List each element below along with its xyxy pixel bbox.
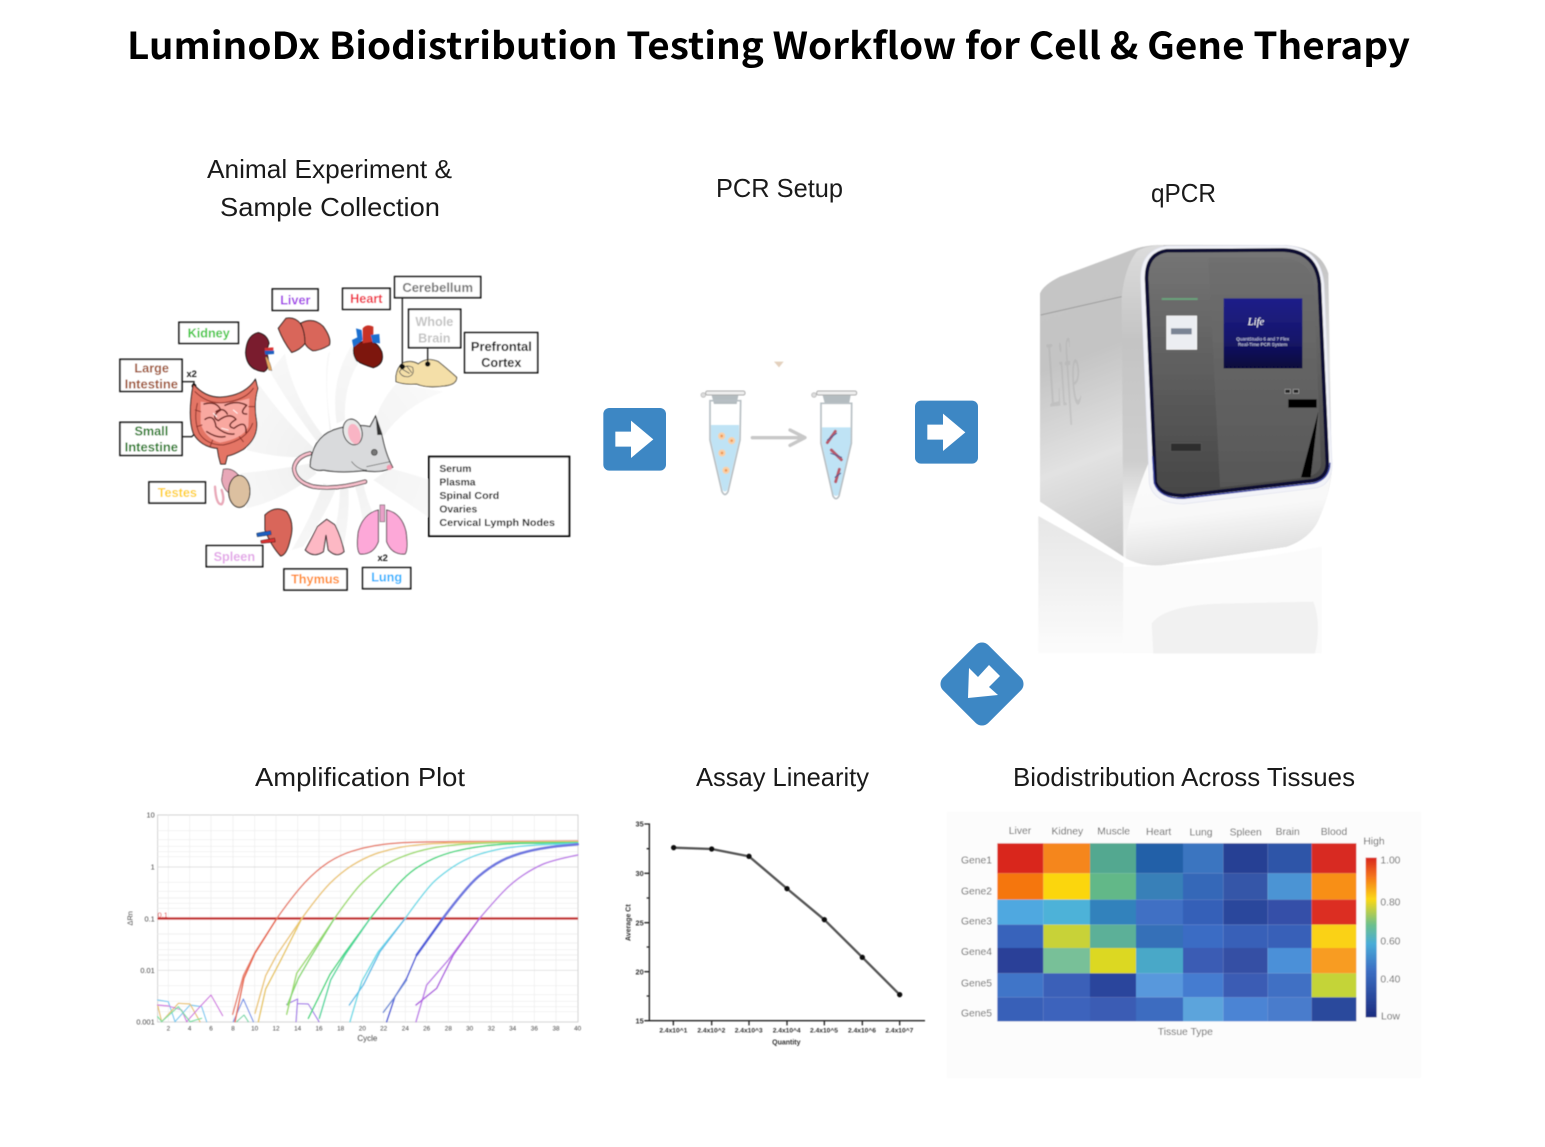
x axis title: Cycle — [357, 1034, 378, 1043]
heatmap cells — [997, 843, 1356, 1021]
perforated section — [1208, 258, 1321, 487]
label: small intestine: Intestine — [125, 440, 178, 454]
list box: other samples: Spinal Cord — [439, 491, 499, 502]
x axis labels: 22 — [380, 1025, 388, 1032]
black numeral seven — [1301, 412, 1318, 477]
axes — [644, 823, 925, 1025]
x axis labels — [167, 1025, 582, 1032]
white base — [1126, 463, 1332, 565]
row labels: Gene3 — [961, 917, 992, 928]
row labels: Gene1 — [961, 856, 992, 867]
column labels: Blood — [1321, 827, 1347, 838]
x axis labels: 12 — [272, 1025, 280, 1032]
label: small intestine — [120, 422, 182, 455]
reflection — [1038, 516, 1322, 653]
organ: lung — [357, 505, 407, 554]
label: large intestine — [120, 359, 182, 391]
x axis labels: 24 — [402, 1025, 409, 1032]
screen text: Life — [1247, 317, 1265, 328]
blue edge glow — [1153, 457, 1330, 498]
column labels: Liver — [1009, 826, 1032, 837]
colour scale: 1.00 — [1380, 856, 1401, 867]
amplification curves — [233, 841, 578, 1022]
heading: biodistribution across tissues: Biodistribution Across Tissues — [1013, 762, 1355, 792]
organ: kidney — [246, 333, 274, 372]
label: whole brain: Brain — [418, 331, 451, 345]
row labels: Gene4 — [961, 947, 992, 958]
y axis labels: 25 — [636, 918, 644, 927]
y axis labels: 0.01 — [140, 966, 155, 975]
label: testes: Testes — [158, 486, 197, 500]
label: small intestine: Small — [134, 424, 168, 438]
y axis labels — [636, 820, 644, 1025]
x axis labels: 36 — [531, 1025, 538, 1032]
x axis labels: 38 — [552, 1025, 560, 1032]
title: LuminoDx Biodistribution Testing Workflow for Cell & Gene Therapy — [127, 16, 1410, 70]
label: heart: Heart — [350, 292, 383, 306]
label: heart — [343, 288, 390, 309]
label: lung: Lung — [371, 571, 402, 585]
y axis labels: 0.001 — [136, 1018, 155, 1027]
panel: qPCR instrument — [1038, 245, 1332, 653]
organ: liver — [278, 318, 330, 352]
x axis labels: 40 — [574, 1025, 582, 1032]
screen — [1224, 298, 1302, 368]
instrument body — [1040, 245, 1332, 565]
radiating rays — [240, 345, 443, 550]
x axis labels: 10 — [251, 1025, 259, 1032]
label: kidney: Kidney — [188, 327, 230, 341]
x axis labels: 2.4x10^2 — [697, 1026, 726, 1034]
x axis title: Tissue Type — [1158, 1027, 1213, 1038]
label: x2 large intestine: x2 — [186, 369, 197, 379]
panel: animal organ diagram — [120, 277, 569, 590]
arrow: qPCR to results — [937, 639, 1027, 729]
list box: other samples: Ovaries — [439, 505, 477, 516]
column labels: Kidney — [1052, 827, 1084, 838]
x axis labels: 32 — [488, 1025, 495, 1032]
row labels: Gene5 — [961, 1008, 992, 1019]
label: large intestine: Intestine — [125, 377, 178, 391]
row labels: Gene5 — [961, 978, 992, 989]
y axis labels: 1 — [151, 863, 155, 872]
organ: thymus — [305, 519, 344, 555]
heading: qPCR: qPCR — [1151, 178, 1216, 208]
label: thymus: Thymus — [291, 573, 340, 587]
x axis labels: 14 — [294, 1025, 302, 1032]
x axis labels: 2 — [167, 1025, 171, 1032]
y axis labels: 35 — [636, 820, 644, 829]
heading: animal experiment and sample collection: Animal Experiment & — [207, 154, 452, 184]
row labels: Gene2 — [961, 886, 992, 897]
x axis labels: 8 — [231, 1025, 235, 1032]
x axis labels: 20 — [359, 1025, 366, 1032]
y axis labels: 20 — [636, 967, 644, 976]
y axis labels: 10 — [147, 811, 155, 820]
label: whole brain: Whole — [415, 315, 453, 329]
status light — [1162, 298, 1198, 300]
colour scale: High — [1363, 837, 1385, 848]
colour scale: 0.60 — [1380, 937, 1401, 948]
label: cerebellum — [395, 277, 481, 298]
list box: other samples: Serum — [439, 464, 471, 475]
label leaders — [182, 298, 428, 437]
label: kidney — [179, 322, 238, 343]
model plate — [1171, 443, 1201, 451]
data line — [674, 848, 900, 995]
chart background — [947, 812, 1421, 1078]
label: prefrontal cortex — [465, 333, 538, 373]
y axis labels: 30 — [636, 869, 644, 878]
label: whole brain — [409, 309, 461, 348]
column labels: Spleen — [1230, 827, 1262, 838]
noise traces — [158, 995, 319, 1022]
label: prefrontal cortex: Prefrontal — [471, 340, 532, 354]
screen text — [1236, 317, 1290, 347]
y axis title: Average Ct — [625, 904, 632, 941]
front panel — [1147, 250, 1327, 496]
badge — [1167, 316, 1197, 349]
colour scale: 0.40 — [1380, 974, 1401, 985]
x axis labels: 18 — [337, 1025, 345, 1032]
label: x2 lung: x2 — [377, 553, 388, 563]
organ: testes — [215, 469, 250, 507]
label: prefrontal cortex: Cortex — [481, 356, 521, 370]
column labels — [1009, 826, 1347, 838]
list box: other samples: Plasma — [439, 477, 476, 488]
x axis labels: 4 — [188, 1025, 192, 1032]
screen text: QuantStudio 6 and 7 Flex — [1236, 337, 1290, 342]
heading: animal experiment and sample collection: Sample Collection — [220, 192, 440, 222]
list box: other samples — [429, 457, 569, 536]
x axis labels: 28 — [445, 1025, 452, 1032]
heading: PCR setup: PCR Setup — [716, 173, 843, 203]
lid seam — [1041, 297, 1122, 315]
x axis labels: 26 — [423, 1025, 431, 1032]
row labels — [961, 856, 992, 1019]
x axis labels: 16 — [315, 1025, 323, 1032]
tube with DNA — [812, 391, 857, 499]
USB ports — [1285, 389, 1299, 393]
marker triangle — [774, 362, 784, 367]
chart: biodistribution heatmap — [947, 812, 1421, 1078]
list box: other samples: Cervical Lymph Nodes — [439, 518, 555, 529]
x axis labels: 2.4x10^4 — [773, 1026, 801, 1034]
arrow: PCR setup to qPCR — [915, 401, 978, 464]
front column — [1122, 245, 1163, 565]
x axis labels: 2.4x10^5 — [810, 1026, 838, 1034]
x axis labels: 2.4x10^6 — [848, 1026, 876, 1034]
y axis labels: 0.1 — [144, 914, 155, 923]
tube with cells — [701, 391, 745, 494]
data points — [671, 845, 902, 997]
column labels: Brain — [1276, 827, 1300, 838]
screen text: Real-Time PCR System — [1238, 342, 1287, 347]
label: spleen — [206, 546, 263, 567]
x axis title: Quantity — [772, 1040, 801, 1047]
x axis labels — [659, 1026, 914, 1034]
x axis labels: 34 — [509, 1025, 517, 1032]
x axis labels: 2.4x10^3 — [735, 1026, 763, 1034]
label: testes — [149, 482, 205, 503]
mouse — [294, 416, 393, 488]
x axis labels: 6 — [209, 1025, 213, 1032]
drawer slot — [1288, 399, 1317, 408]
label: cerebellum: Cerebellum — [402, 281, 473, 295]
heading: assay linearity: Assay Linearity — [696, 762, 869, 792]
organ: spleen — [257, 509, 292, 556]
front rim — [1141, 245, 1332, 504]
y axis labels — [136, 811, 155, 1027]
label: large intestine: Large — [134, 361, 169, 375]
organ: large and small intestine — [190, 379, 258, 464]
column labels: Muscle — [1097, 827, 1130, 838]
colour scale: 0.80 — [1380, 898, 1401, 909]
threshold line: 0.1 — [158, 911, 168, 920]
organ: heart — [352, 325, 382, 368]
y axis labels: 15 — [636, 1016, 644, 1025]
label: liver: Liver — [280, 293, 311, 307]
chart: assay linearity — [625, 820, 925, 1047]
column labels: Lung — [1190, 827, 1213, 838]
side logo: Life — [1042, 319, 1085, 427]
x axis labels: 2.4x10^7 — [885, 1026, 914, 1034]
heading: amplification plot: Amplification Plot — [255, 762, 466, 792]
column labels: Heart — [1146, 827, 1171, 838]
label: spleen: Spleen — [214, 550, 255, 564]
y axis title: ΔRn — [126, 911, 135, 925]
chart: amplification plot — [126, 811, 582, 1043]
colour scale — [1363, 837, 1401, 1023]
x axis labels: 2.4x10^1 — [659, 1026, 688, 1034]
x axis labels: 30 — [466, 1025, 474, 1032]
label: liver — [272, 289, 318, 310]
label: thymus — [284, 569, 347, 590]
process arrow — [752, 430, 805, 445]
colour scale: Low — [1381, 1012, 1400, 1023]
label: lung — [363, 568, 411, 589]
organ: brain — [396, 360, 457, 387]
panel: PCR tubes — [701, 362, 857, 499]
heading: animal experiment and sample collection — [207, 154, 452, 222]
arrow: animal to PCR setup — [603, 408, 666, 471]
